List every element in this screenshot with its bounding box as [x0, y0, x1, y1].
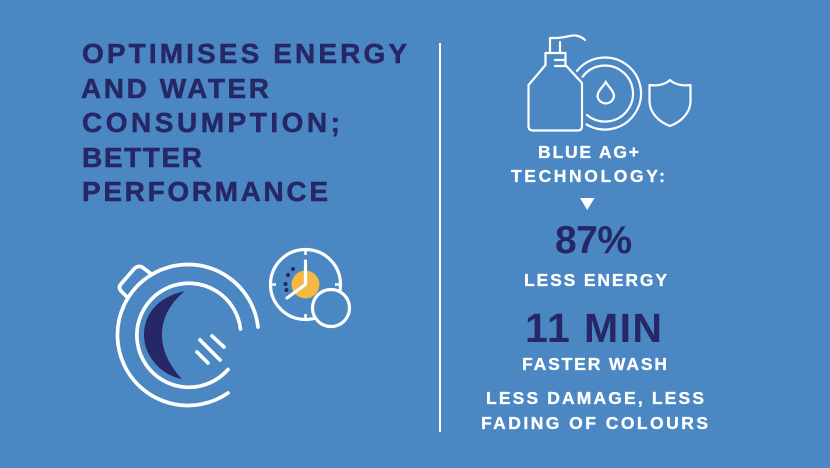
- title: OPTIMISES ENERGY: [82, 38, 407, 69]
- icon: washing machine drum: [117, 264, 258, 405]
- label: less damage: FADING OF COLOURS: [481, 413, 708, 433]
- arrow: down triangle: [580, 198, 594, 210]
- title: AND WATER: [81, 73, 269, 104]
- label: less damage: [481, 388, 708, 433]
- divider: [439, 43, 441, 432]
- stat: 87%: 87%: [555, 219, 632, 262]
- label: Blue Ag+ technology: [511, 142, 665, 186]
- label: less damage: LESS DAMAGE, LESS: [486, 388, 704, 408]
- icon: clock with timer: [270, 250, 350, 326]
- label: less energy: LESS ENERGY: [524, 270, 667, 290]
- icon: plate with water drop: [577, 58, 641, 130]
- stat: 11 min: 11 MIN: [525, 305, 662, 351]
- title: [81, 38, 407, 207]
- title: BETTER: [82, 142, 202, 173]
- title: CONSUMPTION;: [82, 107, 340, 138]
- label: faster wash: FASTER WASH: [522, 354, 667, 374]
- icon: detergent bottle: [528, 35, 585, 130]
- label: Blue Ag+ technology: BLUE AG+: [538, 142, 639, 162]
- title: PERFORMANCE: [82, 176, 328, 207]
- label: Blue Ag+ technology: TECHNOLOGY:: [511, 166, 665, 186]
- icon: shield: [650, 80, 690, 126]
